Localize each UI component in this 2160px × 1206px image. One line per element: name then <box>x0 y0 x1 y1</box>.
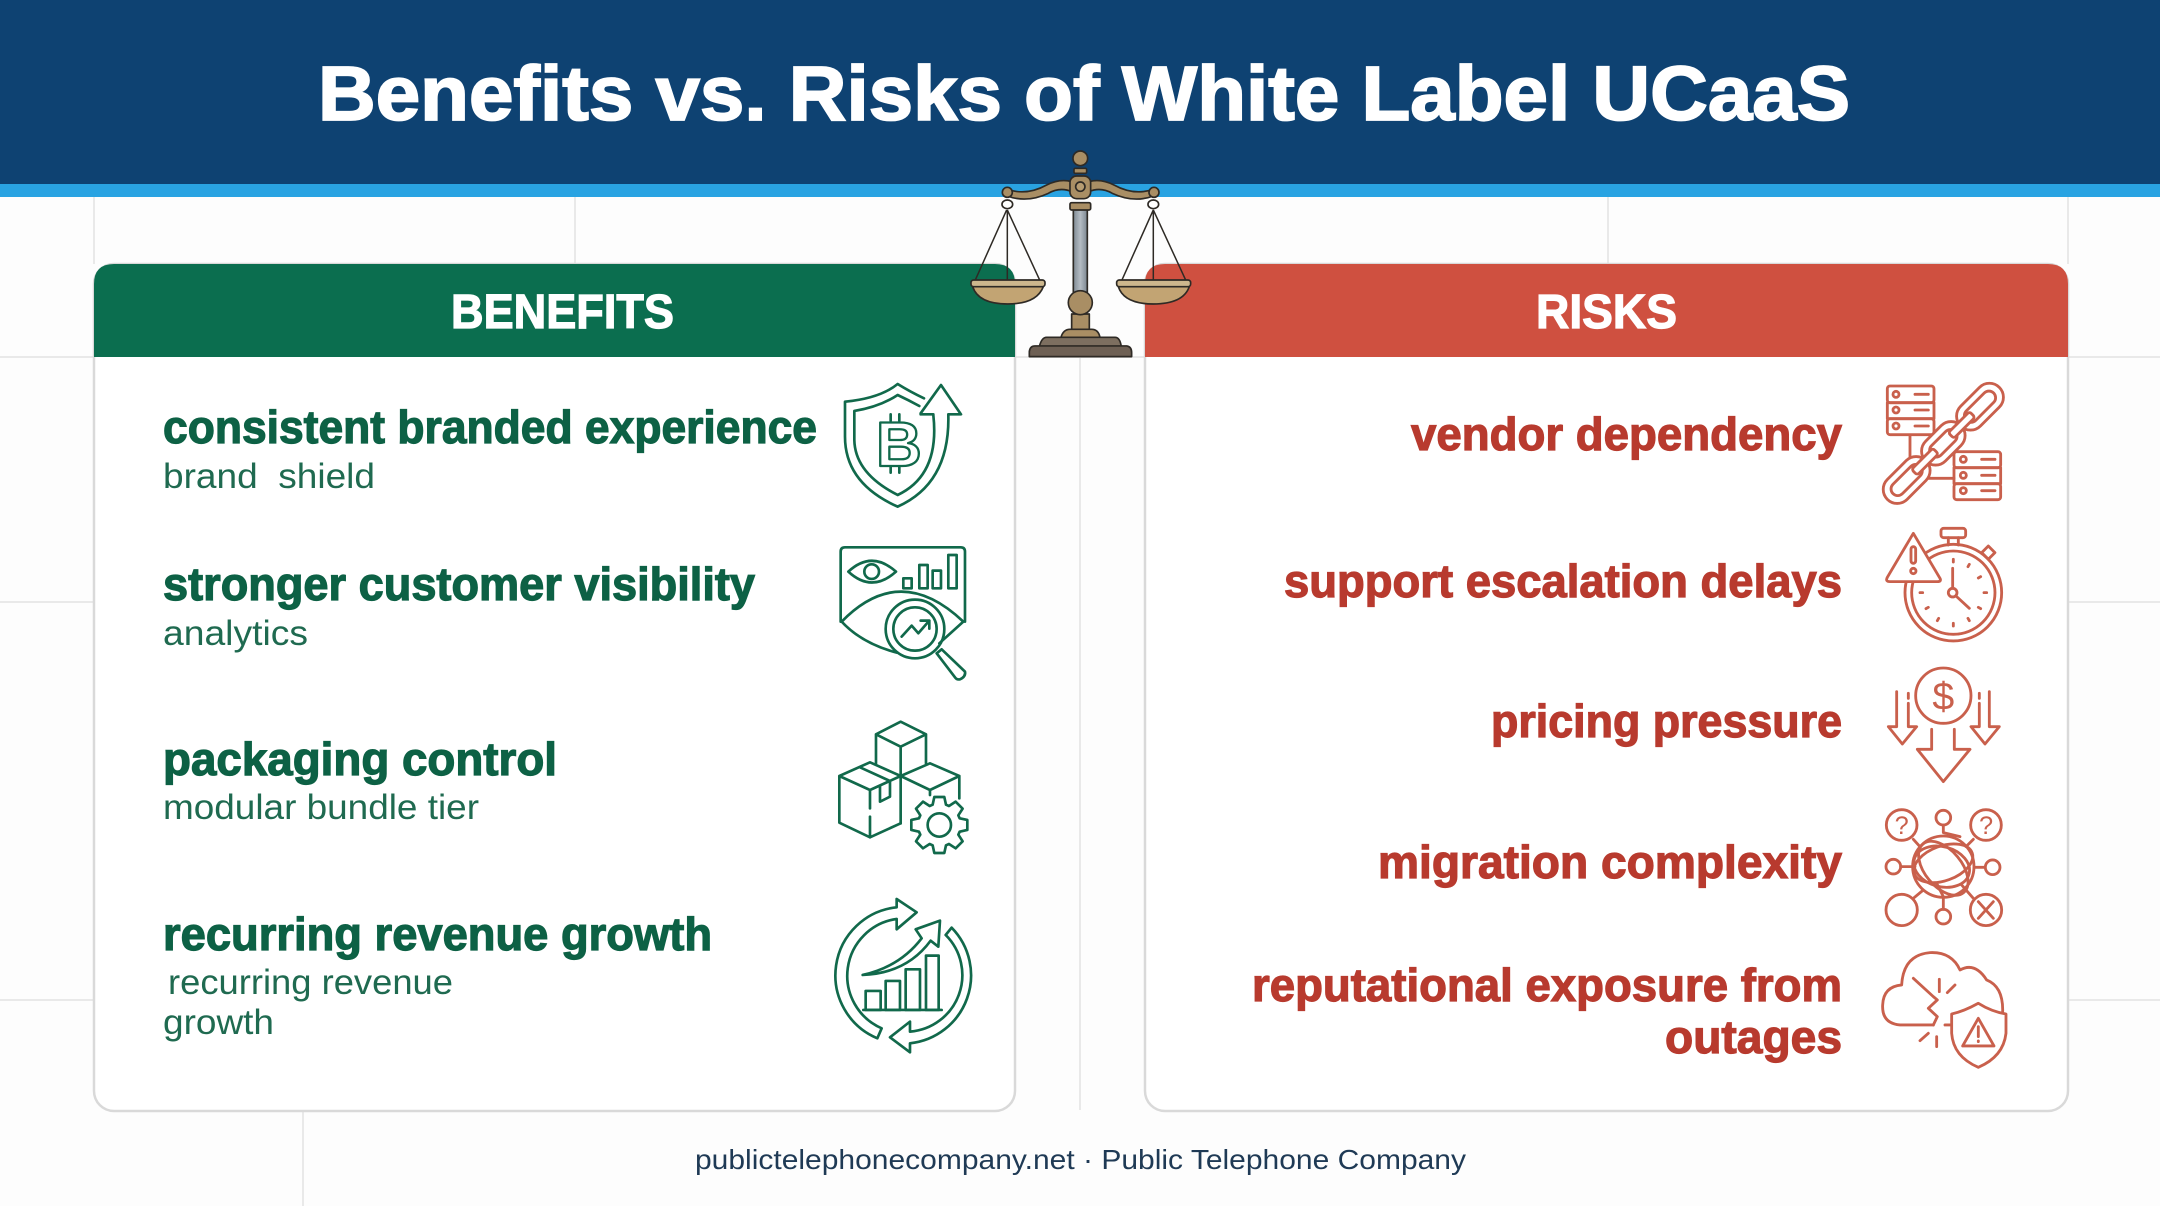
icon: tangled network <box>1886 810 2002 926</box>
benefits header bar <box>94 264 1015 357</box>
footer text: publictelephonecompany.net · Public Telephone Company <box>695 1144 1466 1175</box>
risk: vendor dependency: vendor dependency <box>1411 408 1842 460</box>
right pan <box>1117 280 1191 304</box>
benefit: packaging control: modular bundle tier <box>163 788 479 827</box>
header banner <box>0 0 2160 197</box>
benefit: stronger customer visibility <box>163 558 755 653</box>
icon: price falling arrows: $ <box>1932 674 1954 718</box>
benefit: stronger customer visibility: analytics <box>163 614 308 653</box>
benefit: consistent branded experience <box>163 401 817 496</box>
icon: chained servers <box>1877 377 2009 509</box>
benefit: packaging control: packaging control <box>163 733 557 785</box>
risk: pricing pressure: pricing pressure <box>1491 695 1842 747</box>
benefit: consistent branded experience: consistent branded experience <box>163 401 817 453</box>
risk: reputational exposure from outages: reputational exposure from <box>1252 959 1842 1011</box>
benefit: recurring revenue growth <box>163 908 712 1042</box>
risk: migration complexity: migration complexity <box>1378 836 1842 888</box>
title: Benefits vs. Risks of White Label UCaaS <box>318 51 1850 137</box>
icon: analytics eye and magnifier <box>841 547 965 679</box>
scale strings <box>975 210 1186 281</box>
icon: balance scale <box>971 151 1191 357</box>
benefit: recurring revenue growth: recurring revenue <box>168 963 453 1002</box>
icon: price falling arrows <box>1888 668 1999 782</box>
icon: brand shield with arrow <box>845 384 961 507</box>
icon: stopwatch with warning <box>1887 528 2002 641</box>
icon: modular boxes and gear <box>839 722 967 853</box>
panel: benefits <box>94 264 1015 1111</box>
icon: tangled network: ? <box>1979 812 1993 840</box>
benefit: packaging control <box>163 733 557 827</box>
benefits heading: BENEFITS <box>451 286 674 339</box>
icon: tangled network: ? <box>1895 812 1909 840</box>
icon: recurring growth cycle <box>835 899 971 1052</box>
benefit: consistent branded experience: brand shield <box>163 457 375 496</box>
benefit: recurring revenue growth: recurring revenue growth <box>163 908 712 960</box>
risk: reputational exposure from outages: outages <box>1665 1011 1842 1063</box>
risks heading: RISKS <box>1536 286 1677 339</box>
risk: reputational exposure from outages <box>1252 959 1842 1063</box>
left pan <box>971 280 1045 304</box>
risk: support escalation delays: support escalation delays <box>1284 555 1842 607</box>
benefit: stronger customer visibility: stronger customer visibility <box>163 558 755 610</box>
scale column and base <box>1002 151 1159 357</box>
panel: risks <box>1145 264 2068 1111</box>
benefit: recurring revenue growth: growth <box>163 1003 274 1042</box>
icon: broken cloud with warning shield <box>1883 953 2006 1067</box>
risks header bar <box>1145 264 2068 357</box>
icon: brand shield with arrow: B <box>876 410 922 480</box>
